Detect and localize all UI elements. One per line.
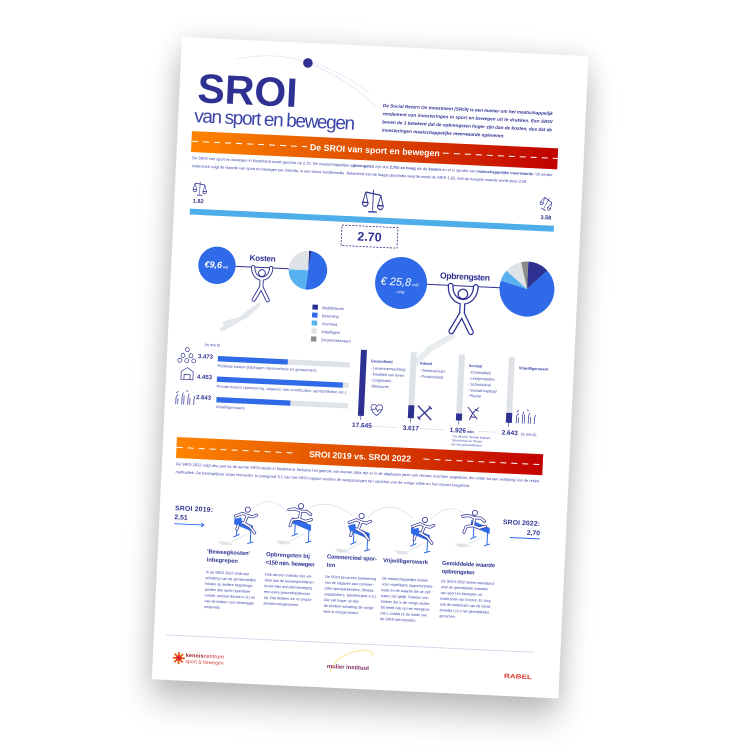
column 4: De maatschappelijke kosten <box>382 577 428 583</box>
icon: social <box>467 407 479 420</box>
vertical bar: gezondheid: - Blessures <box>370 384 389 389</box>
column 5: onderzoek van Ecorys. Er zorg <box>440 597 491 603</box>
dotted connectors <box>372 426 497 432</box>
vertical bar: sociaal: Sociaal <box>469 364 482 369</box>
opbrengsten barbell figure: +PM <box>396 289 405 295</box>
kosten barbell figure: €9,6 mld <box>204 259 229 270</box>
logo: Kenniscentrum <box>172 652 224 667</box>
column 4: voor vrijwilligers (opportuniteits- <box>382 582 434 589</box>
footnote: * De effecten 'Sociale kapitaal', <box>451 434 491 440</box>
column 5: voor de gemiddelde waarden <box>441 585 488 591</box>
column 3 <box>323 554 379 616</box>
kosten row 2 <box>196 375 349 395</box>
hurdle 5 with runner <box>454 509 492 549</box>
value 3.58: 3.58 <box>540 215 551 222</box>
column 3: Die valt hoger uit dan <box>324 598 359 604</box>
column 1: kosten op andere begrotings- <box>205 582 254 588</box>
column 3: De SROI bevat een berekening <box>325 575 376 581</box>
footnote: 'Schooluitval' en 'Plezier' <box>451 438 483 444</box>
opbrengsten barbell figure: Opbrengsten <box>440 270 490 283</box>
section band: De SROI van sport en bewegen <box>191 131 558 169</box>
footer divider <box>167 635 534 652</box>
section body text: De SROI van sport en bewegen in Nederland wordt geschat op 2,70. De maatschappelijke opbrengsten zijn dus 2,70x zo hoog als de kosten en er is sprake van maatschappelijke meerwaarde. Uit eerder <box>192 155 553 177</box>
vertical bar: sociaal: - Sociaal kapitaal <box>468 388 497 394</box>
kosten row 3: Vrijwilligerswerk <box>216 405 245 410</box>
logo: Kenniscentrum: kenniscentrum <box>186 653 224 661</box>
column 1: ruimte, sociaal domein e.d.) en <box>205 593 255 600</box>
column 3: ciële sportaanbieders, (fitness, <box>324 586 375 593</box>
column 1: In de SROI 2022 vindt een <box>206 570 249 576</box>
column 3: Commercieel spor- <box>327 554 377 563</box>
vertical bar: sociaal: 1.926 mln <box>450 427 475 435</box>
column 2: doet aan de beweegrichtlijnen <box>265 578 314 585</box>
legend: Overheid <box>322 322 337 327</box>
column 5: Gemiddelde waarde <box>442 561 496 569</box>
column 1: posten dan sport (openbare <box>205 588 250 594</box>
legend: Bewoning <box>322 314 339 319</box>
range bar <box>190 209 554 232</box>
kosten row 2: 4.453 <box>197 375 213 381</box>
column 2: op. Dat hebben we nu propor- <box>264 596 314 602</box>
column 1: schatting van de gemeentelijke <box>205 576 256 582</box>
legend: Zorgverzekeraars <box>321 338 351 343</box>
footnote: zijn niet gekwantificeerd <box>451 442 482 448</box>
column 1 <box>204 549 258 611</box>
column 5: van sport en bewegen uit <box>440 591 482 597</box>
opbrengsten barbell figure <box>371 256 504 370</box>
poster <box>152 37 589 698</box>
logo: Kenniscentrum: sport & bewegen <box>185 659 224 667</box>
icon: people <box>178 347 196 363</box>
vertical bar: vrijwilligerswerk: (in mln €) <box>521 432 537 437</box>
column 2: Ook als een individu niet vol- <box>265 573 313 579</box>
kosten barbell figure: Kosten <box>249 253 276 264</box>
icon: scale centre <box>362 189 384 212</box>
column 1: inbegrepen <box>207 557 238 565</box>
legend <box>311 304 352 343</box>
kosten row 3 <box>196 395 348 415</box>
column 4: breken die in de vorige studie. <box>381 600 430 606</box>
kosten row 3: 2.643 <box>196 395 212 402</box>
vertical bar: vrijwilligerswerk: Vrijwilligerswerk <box>519 366 549 372</box>
column 3: keer is meegenomen. <box>323 610 359 615</box>
vertical bar: vrijwilligerswerk: 2.643 <box>501 429 518 437</box>
label SROI 2022 <box>502 519 541 539</box>
column 5: De SROI 2022 neemt standaard <box>441 579 494 586</box>
vertical bar: gezondheid: Gezondheid <box>371 359 393 364</box>
vertical bar: sociaal: - Plezier <box>467 394 482 399</box>
hurdle 1 with runner <box>217 506 257 547</box>
column 2: levert elke activiteit beweging <box>264 584 312 590</box>
kosten barbell figure <box>195 246 290 332</box>
decorative dotted arc with dot <box>234 54 379 108</box>
vertical bar: sociaal <box>450 354 498 436</box>
column 4: kost) en de waarde die ze zelf <box>381 588 431 594</box>
vertical bar: vrijwilligerswerk <box>501 357 550 439</box>
icon: tools <box>417 406 432 420</box>
column 4: de SROI beïnvloeden. <box>380 617 416 623</box>
subtitle: van sport en bewegen <box>194 106 356 135</box>
column 3: de eerdere schatting de vorige <box>324 604 374 610</box>
column 2 <box>264 552 316 608</box>
column 1: van de kosten voor beweegge- <box>204 599 256 606</box>
label SROI 2019: 2,51 <box>174 514 188 522</box>
vertical bar: arbeid: 3.617 <box>403 425 419 433</box>
icon: scale high <box>538 195 555 212</box>
opbrengsten barbell figure: € 25,8 mld <box>380 276 420 289</box>
icon: scale low <box>193 181 207 196</box>
label SROI 2019 <box>174 505 213 527</box>
value box 2.70: 2.70 <box>357 229 382 245</box>
vertical bar: sociaal: - Schooluitval <box>468 382 491 387</box>
column 4: halen zijn gelijk. Daarom ont- <box>381 594 430 600</box>
intro text: boven de 1 betekent dat de opbrengsten hoger zijn dan de kosten, dus dat de <box>382 119 553 132</box>
icon: hands <box>176 390 195 405</box>
vertical bar: arbeid <box>403 352 446 434</box>
value box 2.70 <box>341 225 398 248</box>
icon: house <box>181 367 193 380</box>
intro text <box>382 103 554 141</box>
legend: Vrijwilligers <box>321 330 340 335</box>
section band: SROI 2019 vs. SROI 2022 <box>176 437 544 475</box>
vertical bar: gezondheid: 17.645 <box>352 422 372 430</box>
vertical bar: sociaal: - Leerprestaties <box>468 376 495 382</box>
column 4: Vrijwilligerswerk <box>383 558 429 566</box>
column 5: ook de onderkant van de band- <box>440 602 492 609</box>
value 1.82: 1.82 <box>193 199 204 205</box>
column 4: Dit heeft ook op het meegeno- <box>381 605 431 612</box>
vertical bar: gezondheid: - Kwaliteit van leven <box>370 372 404 378</box>
kosten row 2: Private kosten (sponsoring, uitgaven aan contributies, sportartikelen etc.) <box>216 385 347 395</box>
label SROI 2022: 2,70 <box>527 530 540 537</box>
column 2: tioneel meegenomen. <box>264 601 299 607</box>
icon: heart <box>370 404 383 416</box>
vertical bar: gezondheid: - Zorgkosten <box>370 378 391 383</box>
logo: Rabel: RABEL <box>504 673 532 681</box>
label SROI 2022: SROI 2022: <box>503 519 540 528</box>
column 3: ten <box>326 563 336 569</box>
section body text: onderzoek volgt de waarde van sport en bewegen per individu, in een ruime bandbreedte. Rekenend met de laagst geschatte waarde wordt de SROI 1,82, met de hoogste waarde wordt deze 3,58. <box>192 163 527 184</box>
kosten row 1: 3.473 <box>198 354 214 361</box>
vertical bar: arbeid: - Ziekteverzuim <box>419 369 446 374</box>
vertical bar: gezondheid: - Levensverwachting <box>371 366 405 372</box>
icon: hands <box>516 409 536 424</box>
intro text: investeringen maatschappelijke meerwaarde opleveren. <box>382 128 505 138</box>
section band: De SROI van sport en bewegen: De SROI van sport en bewegen <box>310 142 440 158</box>
column 2: <150 min. bewegen <box>265 560 315 569</box>
section band: SROI 2019 vs. SROI 2022: SROI 2019 vs. SROI 2022 <box>309 449 411 464</box>
column 3: van de uitgaven aan commer- <box>325 581 374 587</box>
vertical bar: gezondheid <box>352 350 406 431</box>
label SROI 2019: SROI 2019: <box>175 505 213 514</box>
column 2: een extra gezondheidswinst <box>264 590 310 596</box>
intro text: rendement van investeringen in sport en bewegen uit te drukken. Een SROI <box>382 111 553 124</box>
column 4: men, omdat ze de totale van <box>380 611 427 617</box>
column 4 <box>380 558 435 624</box>
logo: Mulier Instituut: mulier instituut <box>327 664 369 672</box>
column 1: 'Beweegkosten' <box>207 549 251 557</box>
vertical bar: arbeid: - Productiviteit <box>419 375 444 380</box>
column 5: opbrengsten <box>442 569 475 577</box>
vertical bar: arbeid: Arbeid <box>420 362 433 366</box>
pie chart: opbrengsten <box>498 260 556 318</box>
footnote <box>451 434 491 448</box>
column 2: Opbrengsten bij <box>266 552 310 560</box>
pie chart: kosten <box>288 250 328 291</box>
hurdle 4 with runner <box>394 516 434 556</box>
column 5: genomen. <box>439 614 456 619</box>
section 2 body text: methodiek. De belangrijkste staan hieronder. In paragraaf 5.1 van het SROI-rapport worden de aanpassingen ten opzichte van de vorige editie en hun impact toegelicht. <box>175 469 470 488</box>
column 5: breedte (>2,x het gemiddelde) <box>440 608 489 615</box>
intro text: De Social Return On Investment (SROI) is een manier om het maatschappelijk <box>383 103 553 116</box>
title: SROI <box>197 65 299 116</box>
column 5 <box>439 561 496 621</box>
unit note: (in mln €) <box>204 343 221 348</box>
hurdle 3 with runner <box>334 512 372 554</box>
logo: Mulier Instituut <box>327 649 373 674</box>
column 3: yogastudio's, fysiotherapie e.d.). <box>324 592 377 599</box>
kosten row 1 <box>197 354 350 374</box>
section 2 body text: De SROI 2022 volgt drie jaar na de eerste SROI-studie in Nederland. Behalve het gebruik van nieuwe data zijn er in de afgelopen jaren ook nieuwe inzichten opgedaan, die onder tot een verfijning van de reken- <box>176 461 541 483</box>
vertical bar: sociaal: - Criminaliteit <box>468 370 492 375</box>
column 1: onderwijs. <box>204 605 221 610</box>
hurdle 2 with runner <box>275 502 313 546</box>
kosten row 1: Publieke kosten (bijdragen rijksoverheid en gemeenten) <box>217 364 317 373</box>
legend: Bedrijfsleven <box>322 306 344 311</box>
dotted arcs between hurdles <box>250 499 468 522</box>
